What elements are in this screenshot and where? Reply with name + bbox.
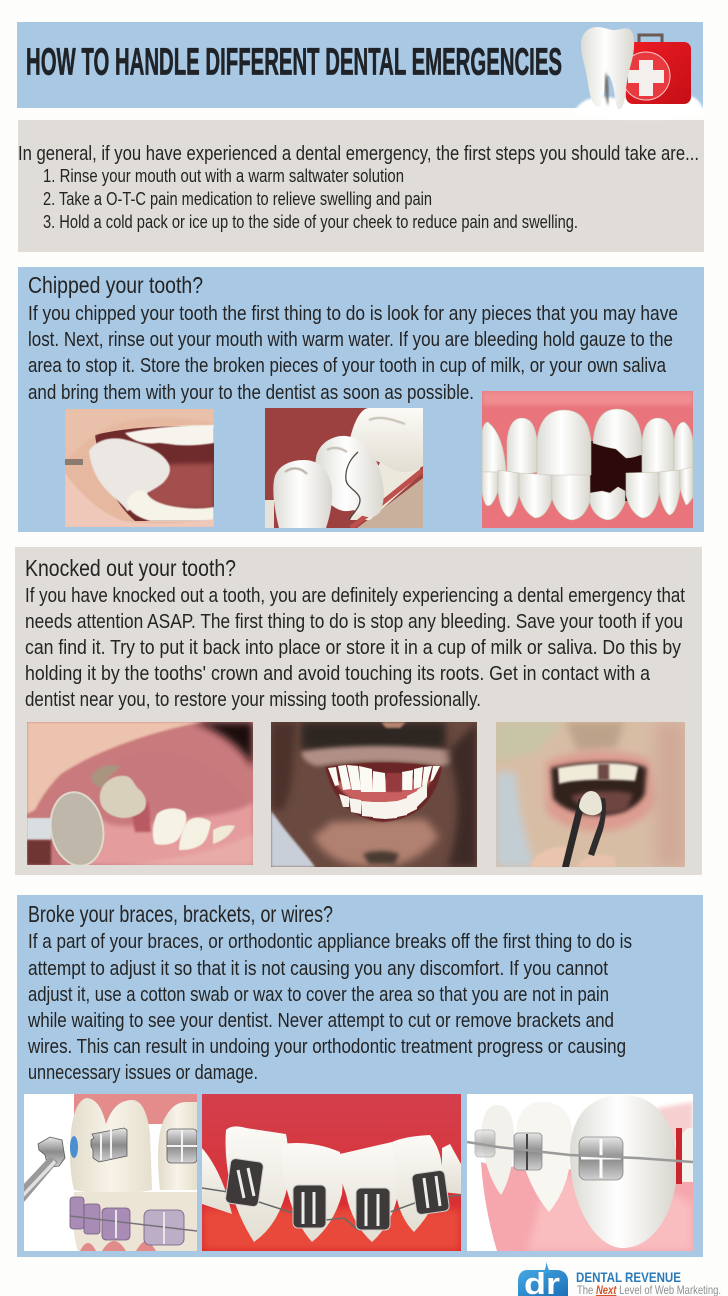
lower brackets [70, 1197, 184, 1245]
body text [25, 584, 685, 711]
logo mark [518, 1262, 568, 1296]
body text: attempt to adjust it so that it is not causing you any discomfort. If you cannot [28, 957, 608, 980]
heading: Broke your braces, brackets, or wires? [28, 901, 333, 927]
illustration: bracket removal [22, 1094, 197, 1251]
panel: general first steps [18, 120, 704, 252]
step 2: 2. Take a O-T-C pain medication to relieve swelling and pain [43, 188, 432, 209]
illustration: silver brackets [467, 1094, 693, 1251]
body text: while waiting to see your dentist. Never attempt to cut or remove brackets and [27, 1009, 614, 1032]
photo: gauze in mouth [65, 409, 214, 527]
illustration: red gum braces [202, 1094, 461, 1251]
step 1: 1. Rinse your mouth out with a warm saltwater solution [43, 165, 404, 186]
brackets [38, 1128, 197, 1167]
photo: chipped front teeth [482, 391, 693, 528]
icon: tooth [581, 27, 634, 109]
panel: broken braces [17, 895, 703, 1257]
logo: Dental Revenue [518, 1262, 721, 1296]
heading: Knocked out your tooth? [25, 555, 236, 581]
body text: dentist near you, to restore your missing tooth professionally. [25, 688, 481, 711]
panel: chipped tooth [18, 267, 704, 532]
heading: Chipped your tooth? [28, 272, 203, 298]
photo: smile with gap [271, 722, 477, 867]
title banner [17, 22, 703, 108]
icon: tooth and first aid kit [574, 27, 704, 119]
body text: and bring them with your to the dentist as soon as possible. [28, 381, 474, 404]
logo name: DENTAL REVENUE [576, 1269, 681, 1285]
photo: mirror and missing tooth [27, 722, 253, 870]
icon: first aid kit [622, 35, 691, 104]
body text: holding it by the tooths' crown and avoid touching its roots. Get in contact with a [25, 662, 651, 685]
body text: adjust it, use a cotton swab or wax to cover the area so that you are not in pain [28, 983, 609, 1006]
photo: tweezers holding tooth [496, 722, 685, 867]
panel: knocked out tooth [15, 547, 702, 875]
body text: unnecessary issues or damage. [28, 1061, 258, 1084]
body text [28, 302, 678, 404]
step 3: 3. Hold a cold pack or ice up to the side of your cheek to reduce pain and swelling. [43, 211, 578, 232]
photo: cracked molar [265, 408, 423, 528]
body text [27, 930, 632, 1084]
